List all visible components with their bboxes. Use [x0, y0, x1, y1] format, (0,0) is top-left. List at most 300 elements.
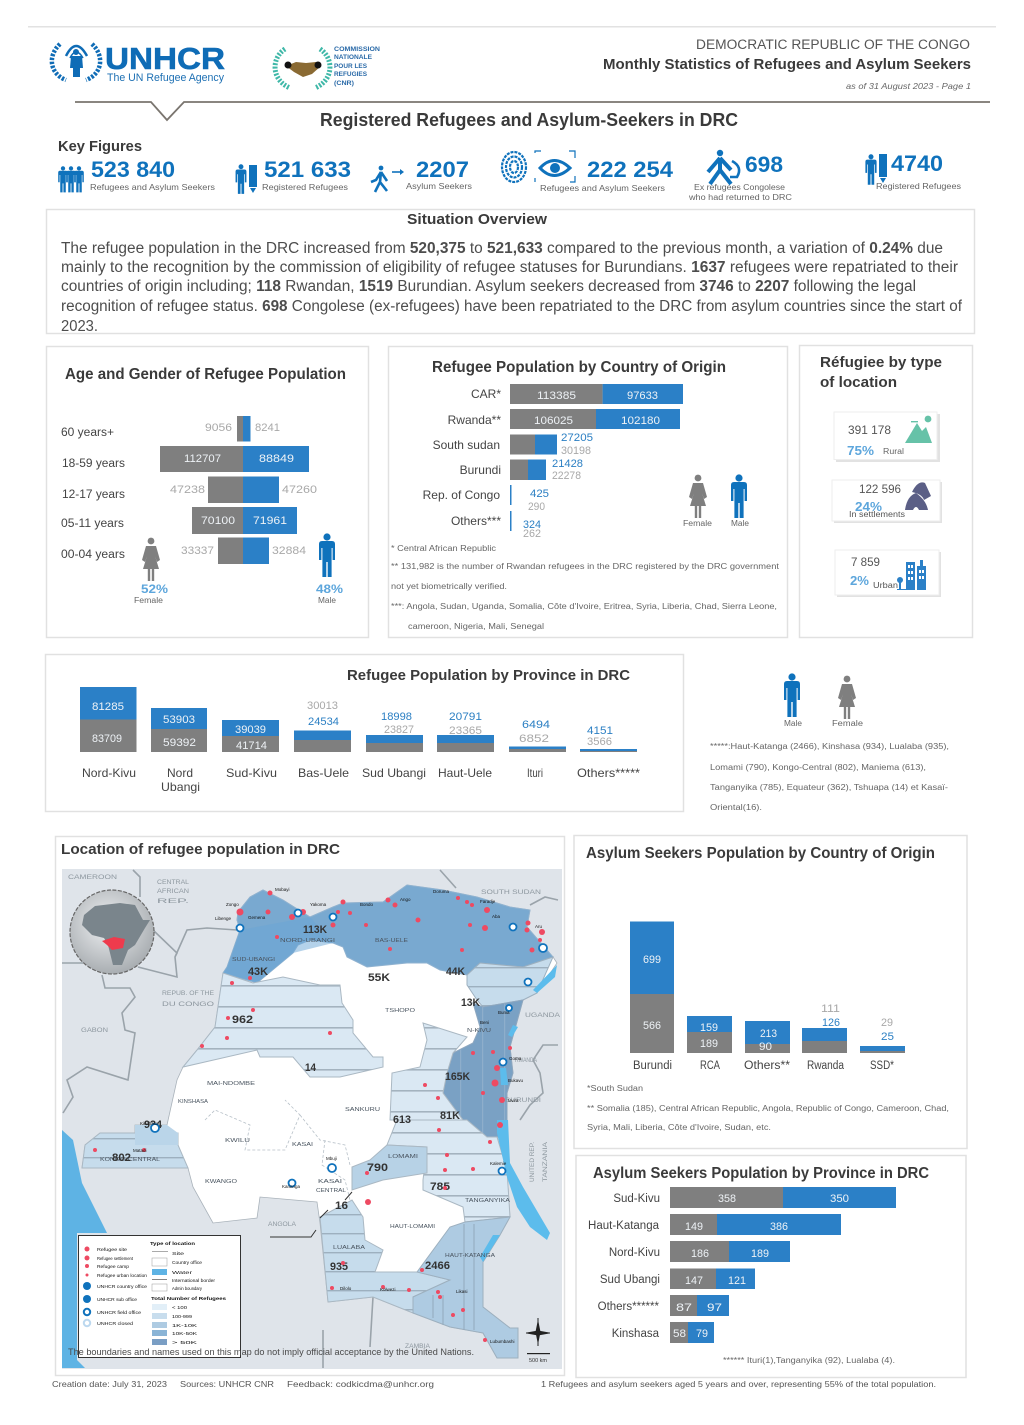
card: rural: 75%: [847, 444, 874, 458]
key figure: returned ex-refugees: [688, 150, 792, 202]
key figure: refugees and asylum seekers: [58, 157, 215, 192]
logo text: [334, 47, 380, 87]
stacked column chart: 39039: [235, 724, 266, 736]
overview paragraph: countries of origin including; 118 Rwandan, 1519 Burundian. Asylum seekers decreased from 3746 to 2207 following the legal: [61, 278, 916, 295]
country labels: [423, 387, 501, 528]
province labels: Bas-Uele: [298, 766, 349, 780]
key figure: asylum seekers: Asylum Seekers: [406, 182, 472, 191]
town labels: Dilolo: [340, 1286, 352, 1291]
legend: boundary types and classes: Admin boundary: [172, 1286, 203, 1291]
legend: boundary types and classes: > 50K: [172, 1340, 197, 1345]
key figure: returned ex-refugees: Ex refugees Congolese: [694, 183, 786, 192]
lakes: [480, 965, 557, 1262]
town labels: Libenge: [215, 916, 232, 921]
town labels: Doruma: [433, 889, 450, 894]
footnote: other provinces: Tanganyika (785), Equateur (362), Tshuapa (14) et Kasaï-: [710, 783, 948, 792]
footnotes: not yet biometrically verified.: [391, 582, 507, 591]
heading: Age and Gender of Refugee Population: [65, 366, 346, 383]
key figure: biometric registration: Refugees and Asylum Seekers: [540, 183, 665, 193]
stacked column chart: 126: [822, 1017, 840, 1029]
stacked bar chart: 27205: [561, 432, 593, 444]
leader lines: [270, 1192, 352, 1237]
stacked bar chart: 102180: [621, 415, 660, 427]
population pyramid: 47238: [170, 484, 205, 496]
stacked column chart: 4151: [587, 725, 613, 737]
province labels: Kinshasa: [612, 1328, 660, 1340]
card: urban: Urban: [873, 581, 898, 590]
province labels: Haut-Uele: [438, 766, 492, 780]
map: [62, 869, 562, 1369]
stacked column chart: 699: [643, 954, 661, 966]
legend: site symbols: UNHCR country office: [97, 1284, 148, 1289]
country labels: TANZANIA: [542, 1141, 549, 1182]
stacked column chart: [630, 922, 905, 1053]
footer: credits: Feedback: codkicdma@unhcr.org: [287, 1379, 434, 1389]
town labels: Uvira: [508, 1098, 519, 1103]
town labels: Lubumbashi: [490, 1339, 515, 1344]
stacked bar chart: 149: [685, 1221, 703, 1233]
footnote: other provinces: [710, 742, 949, 812]
north arrow: [526, 1318, 550, 1346]
province refugee totals: 13K: [461, 997, 480, 1009]
town labels: Bunia: [498, 1010, 510, 1015]
logo text: COMMISSION: [334, 47, 380, 53]
ocean: [62, 1130, 107, 1368]
stacked bar chart: 147: [685, 1275, 703, 1287]
stacked column chart: 23827: [384, 724, 414, 736]
province: Lomami: [352, 1145, 427, 1190]
key figure: biometric registration: 222 254: [587, 157, 674, 182]
province labels: Sud Ubangi: [600, 1274, 660, 1286]
overview paragraph: mainly to the recognition by the commission of eligibility of refugee statuses for Burundians. 1637 refugees were repatriated to their: [61, 259, 958, 276]
icon: eye scan: [535, 151, 575, 182]
footnotes: * Central African Republic: [391, 544, 496, 553]
country labels: ANGOLA: [268, 1221, 297, 1228]
neighbouring country borders: [62, 870, 558, 1368]
province: Equateur and Tshuapa: [183, 973, 383, 1077]
footnote: other provinces: Oriental(16).: [710, 803, 762, 812]
stacked bar chart: 79: [696, 1328, 708, 1340]
province refugee totals: 962: [232, 1014, 253, 1026]
overview paragraph: The refugee population in the DRC increased from 520,375 to 521,633 compared to the previous month, a variation of 0.24% due: [61, 240, 943, 257]
country labels: Others***: [451, 514, 501, 528]
town labels: Bondo: [360, 902, 374, 907]
footer: credits: [52, 1379, 434, 1389]
male share: 48%: [316, 582, 343, 596]
logo text: REFUGIES: [334, 72, 367, 78]
country labels: [68, 874, 561, 1350]
province labels: Nord-Kivu: [609, 1247, 660, 1259]
stacked bar chart: 324: [523, 519, 541, 531]
population pyramid: 33337: [181, 545, 214, 557]
country labels: Rwanda**: [448, 413, 501, 427]
legend: site symbols: Refugee settlement: [97, 1256, 134, 1261]
province refugee totals: 785: [430, 1181, 450, 1193]
country labels: [633, 1060, 894, 1072]
town labels: Bukavu: [508, 1078, 524, 1083]
key figure: asylum seekers: 2207: [416, 157, 469, 182]
province refugee totals: 44K: [446, 966, 465, 978]
icon: tents: [905, 482, 931, 510]
province labels: TSHOPO: [385, 1008, 416, 1014]
overview paragraph: 2023.: [61, 318, 98, 335]
footnote: ****** Ituri(1),Tanganyika (92), Lualaba (4).: [723, 1356, 895, 1365]
population pyramid: [160, 416, 317, 564]
town labels: Kolwezi: [380, 1287, 396, 1292]
legend: boundary types and classes: 100-999: [172, 1314, 193, 1319]
icon: person with document: [865, 154, 887, 185]
stacked bar chart: 358: [718, 1193, 736, 1205]
province labels: SANKURU: [345, 1107, 380, 1113]
country labels: UGANDA: [525, 1012, 561, 1019]
heading: of location: [820, 374, 897, 391]
province labels: Nord-Kivu: [82, 766, 136, 780]
provinces: northern band: [223, 885, 553, 983]
legend: boundary types and classes: Country office: [172, 1260, 203, 1265]
stacked bar chart: 262: [523, 528, 541, 540]
province labels: [588, 1193, 660, 1340]
country labels: Burundi: [460, 463, 501, 477]
province refugee totals: 43K: [248, 966, 268, 978]
legend: boundary types and classes: Total Number of Refugees: [151, 1296, 227, 1301]
province: Ituri: [467, 957, 553, 1007]
stacked bar chart: 97: [707, 1302, 722, 1314]
province labels: N-KIVU: [467, 1028, 491, 1034]
refugee site markers: [93, 890, 545, 1342]
heading: Asylum Seekers Population by Province in DRC: [593, 1165, 929, 1182]
footnotes: [587, 1084, 949, 1132]
stacked bar chart: 425: [530, 488, 549, 500]
logo wordmark: UNHCR: [105, 41, 225, 76]
country labels: REP.: [157, 898, 189, 905]
province: Lualaba: [320, 1200, 450, 1313]
map background: [62, 869, 562, 1369]
header: UNHCR logo: [52, 41, 225, 84]
provinces: Nord-Kivu and Sud-Kivu: [443, 1000, 523, 1137]
main title: Registered Refugees and Asylum-Seekers in DRC: [320, 110, 738, 130]
stacked column chart: 30013: [307, 700, 338, 712]
town labels: Yakoma: [310, 902, 327, 907]
scale bar: [527, 1353, 550, 1364]
stacked column chart: 159: [700, 1022, 718, 1034]
UNHCR office markers: [151, 910, 547, 1186]
province boundaries: [205, 1100, 350, 1200]
stacked column chart: [80, 687, 637, 752]
legend: site symbols: Refugee site: [97, 1247, 128, 1252]
logo text: NATIONALE: [334, 55, 372, 61]
legend: boundary types and classes: < 100: [172, 1305, 188, 1310]
province refugee totals: 802: [112, 1152, 131, 1164]
town labels: Zongo: [226, 902, 239, 907]
province labels: Sud-Kivu: [226, 766, 277, 780]
icon: female: [142, 538, 160, 581]
country labels: Rwanda: [807, 1060, 845, 1072]
province: Kinshasa: [135, 1125, 178, 1145]
province refugee totals: 935: [330, 1261, 348, 1273]
country labels: CAMEROON: [68, 874, 117, 881]
province labels: [100, 938, 510, 1259]
province labels: Sud-Kivu: [613, 1193, 660, 1205]
top rule: [28, 26, 996, 28]
province: Haut-Katanga: [413, 1217, 518, 1358]
province labels: KWILU: [225, 1138, 250, 1144]
stacked column chart: 566: [643, 1020, 661, 1032]
panel: asylum seekers by country of origin: [574, 836, 967, 1148]
town labels: Kananga: [282, 1184, 301, 1189]
population pyramid: 88849: [259, 453, 294, 465]
male share: [316, 582, 343, 605]
footnotes: *South Sudan: [587, 1084, 643, 1093]
card: rural: [834, 412, 940, 462]
stacked column chart: 3566: [587, 736, 612, 748]
province: Maniema: [390, 1023, 467, 1120]
stacked column chart: 90: [759, 1041, 772, 1053]
population pyramid: 9056: [205, 422, 232, 434]
age labels: 05-11 years: [61, 518, 124, 530]
header: report title block: [603, 37, 971, 91]
legend: site symbols: [83, 1246, 148, 1326]
heading: Réfugiee by type: [820, 354, 942, 371]
stacked column chart: 111: [821, 1003, 840, 1015]
town labels: Kalemie: [490, 1161, 507, 1166]
country labels: GABON: [81, 1027, 108, 1034]
town labels: Matadi: [133, 1148, 147, 1153]
province labels: TANGANYIKA: [465, 1198, 510, 1204]
key figure: registered refugees 4740: Registered Refugees: [876, 181, 961, 191]
key figure: registered refugees 4740: 4740: [891, 151, 943, 176]
province labels: MAI-NDOMBE: [207, 1081, 255, 1087]
town labels: Likasi: [456, 1289, 468, 1294]
footnotes: ** 131,982 is the number of Rwandan refugees in the DRC registered by the DRC government: [391, 562, 780, 571]
heading: key figures: Key Figures: [58, 139, 142, 155]
province refugee totals: 165K: [445, 1071, 470, 1083]
legend: site symbols: UNHCR closed: [97, 1321, 134, 1326]
DRC white base: [82, 885, 557, 1358]
province: Kongo-Central: [82, 1133, 188, 1168]
female share: 52%: [141, 582, 168, 596]
key figure: registered refugees 4740: [865, 151, 961, 191]
province refugee totals: 16: [335, 1200, 348, 1212]
town labels: Goma: [509, 1056, 522, 1061]
globe inset: [70, 890, 154, 974]
logo text: (CNR): [334, 81, 354, 87]
province refugee totals: 113K: [303, 924, 327, 936]
stacked column chart: 189: [700, 1038, 718, 1050]
stacked column chart: 6494: [522, 719, 550, 731]
province labels: Haut-Katanga: [588, 1220, 660, 1232]
legend: boundary types and classes: 1K-10K: [172, 1323, 197, 1328]
province refugee totals: 81K: [440, 1110, 460, 1122]
header: report title block: DEMOCRATIC REPUBLIC OF THE CONGO: [696, 37, 970, 52]
female share: [134, 582, 168, 605]
stacked bar chart: 121: [728, 1275, 746, 1287]
country labels: Burundi: [633, 1060, 672, 1072]
card: rural: Rural: [883, 447, 904, 456]
country labels: SOUTH SUDAN: [481, 889, 541, 896]
panel: asylum seekers by province: [576, 1156, 966, 1378]
icon: group of people: [58, 166, 84, 192]
town labels: Kinshasa: [140, 1121, 159, 1126]
town labels: Beni: [480, 1020, 489, 1025]
country labels: ZAMBIA: [405, 1343, 431, 1350]
key figure: asylum seekers: [371, 157, 472, 192]
panel: refugee by type of location: [800, 346, 972, 638]
footnotes: cameroon, Nigeria, Mali, Senegal: [408, 622, 544, 631]
logo tagline: The UN Refugee Agency: [107, 72, 224, 84]
legend: female: Female: [683, 519, 713, 528]
panel: age and gender: [46, 346, 368, 638]
stacked column chart: 23365: [449, 725, 482, 737]
age labels: [61, 427, 125, 561]
province: Tanganyika: [387, 1120, 510, 1222]
town labels: Aru: [535, 924, 542, 929]
province labels: HAUT-KATANGA: [445, 1253, 495, 1259]
stacked column chart: 24534: [308, 716, 339, 728]
country labels: South sudan: [433, 438, 500, 452]
footer: population note: 1 Refugees and asylum seekers aged 5 years and over, representing 55% of the total population.: [541, 1379, 936, 1389]
legend: male and female for province chart: Male: [784, 719, 803, 728]
legend: site symbols: UNHCR sub office: [97, 1297, 138, 1302]
town labels: Mbuji: [326, 1156, 337, 1161]
country labels: BURUNDI: [505, 1097, 541, 1104]
province refugee totals: 613: [393, 1114, 411, 1126]
province labels: KWANGO: [205, 1179, 238, 1185]
age labels: 18-59 years: [62, 458, 125, 470]
stacked bar chart: 87: [676, 1302, 692, 1314]
stacked column chart: 6852: [519, 733, 549, 745]
population pyramid: 70100: [201, 515, 235, 527]
stacked bar chart: 290: [528, 501, 545, 513]
province labels: BAS-UELE: [375, 938, 408, 944]
heading: Location of refugee population in DRC: [61, 841, 340, 858]
footnotes: ***: Angola, Sudan, Uganda, Somalia, Côte d'Ivoire, Eritrea, Syria, Liberia, Chad, Sierra Leone,: [391, 602, 777, 611]
country labels: DU CONGO: [162, 1001, 214, 1008]
country labels: Rep. of Congo: [423, 488, 500, 502]
card: urban: 2%: [850, 574, 869, 588]
legend: male and female for province chart: [784, 673, 864, 728]
heading: Refugee Population by Province in DRC: [347, 667, 630, 684]
stacked bar chart: 189: [751, 1248, 769, 1260]
key figure: returned ex-refugees: 698: [745, 152, 783, 177]
heading: [820, 354, 942, 391]
province labels: KASAI: [318, 1179, 343, 1185]
stacked column chart: 83709: [92, 733, 122, 745]
legend: site symbols: Refugee urban location: [97, 1273, 148, 1278]
stacked bar chart: 58: [673, 1328, 686, 1340]
stacked column chart: 41714: [236, 740, 267, 752]
country labels: RWANDA: [515, 1057, 538, 1064]
town labels: Ango: [400, 897, 411, 902]
legend: male: [731, 474, 750, 528]
country labels: REPUB. OF THE: [162, 990, 215, 997]
population pyramid: 8241: [255, 422, 280, 434]
province refugee totals: 934: [144, 1119, 163, 1131]
province labels: KASAI: [292, 1142, 314, 1148]
population pyramid: 32884: [272, 545, 306, 557]
stacked bar chart: [510, 384, 683, 540]
header: CNR logo: [275, 47, 380, 88]
footnote: other provinces: Lomami (790), Kongo-Central (802), Maniema (613),: [710, 763, 926, 772]
female share: Female: [134, 596, 164, 605]
age labels: 12-17 years: [62, 489, 125, 501]
province refugee totals: 14: [305, 1062, 317, 1074]
map disclaimer: The boundaries and names used on this map do not imply official acceptance by the United Nations.: [68, 1347, 474, 1358]
icon: walking person with arrow: [371, 166, 404, 192]
stacked bar chart: 30198: [561, 445, 591, 457]
card: in settlements: In settlements: [849, 510, 905, 519]
scale bar: 500 km: [529, 1358, 547, 1364]
footnotes: ** Somalia (185), Central African Republic, Angola, Republic of Congo, Cameroon, Chad,: [587, 1104, 949, 1113]
key figure: registered refugees: 521 633: [264, 157, 351, 182]
population pyramid: 47260: [282, 484, 317, 496]
key figure: refugees and asylum seekers: Refugees and Asylum Seekers: [90, 182, 215, 192]
icon: male: [319, 533, 335, 577]
province labels: Ubangi: [161, 780, 200, 794]
population pyramid: 112707: [184, 453, 221, 465]
country labels: RCA: [700, 1060, 720, 1072]
icon: UNHCR emblem: [52, 44, 100, 80]
stacked column chart: 29: [881, 1017, 893, 1029]
country labels: SSD*: [870, 1060, 894, 1072]
stacked column chart: 53903: [163, 714, 195, 726]
legend: site symbols: UNHCR field office: [97, 1310, 142, 1315]
legend: boundary types and classes: [150, 1241, 227, 1345]
icon: person with document: [236, 164, 257, 194]
key figure: returned ex-refugees: who had returned to DRC: [688, 193, 792, 202]
male share: Male: [318, 596, 337, 605]
province refugee totals: 55K: [368, 972, 390, 984]
footer: credits: Sources: UNHCR CNR: [180, 1379, 274, 1389]
stacked bar chart: 21428: [552, 458, 583, 470]
country labels: AFRICAN: [157, 888, 189, 895]
card: rural: 391 178: [848, 425, 891, 437]
card: in settlements: 24%: [855, 500, 882, 514]
town labels: Faradje: [480, 899, 496, 904]
town labels: Gemena: [248, 915, 266, 920]
province labels: Nord: [167, 766, 193, 780]
province refugee totals: [112, 924, 480, 1273]
logo text: POUR LES: [334, 64, 367, 70]
country labels: UNITED REP.: [529, 1142, 536, 1182]
icon: wreath and handshake: [275, 49, 330, 88]
province labels: NORD-UBANGI: [280, 938, 336, 944]
legend: boundary types and classes: International border: [172, 1278, 216, 1283]
legend: site symbols: Refugee camp: [97, 1264, 130, 1269]
header rule with chevron: [75, 102, 990, 120]
province labels: Ituri: [527, 766, 543, 780]
panel: location of refugee population map: [56, 836, 564, 1376]
legend: male and female for province chart: Female: [832, 719, 864, 728]
province labels: KONGO-CENTRAL: [100, 1157, 160, 1163]
header: report title block: Monthly Statistics of Refugees and Asylum Seekers: [603, 56, 971, 73]
card: urban: 7 859: [851, 557, 880, 569]
panel: refugee population by country of origin: [388, 346, 788, 638]
age labels: 60 years+: [61, 427, 114, 439]
stacked bar chart: 113385: [537, 390, 576, 402]
legend: boundary types and classes: Site: [172, 1251, 185, 1256]
province labels: HAUT-LOMAMI: [390, 1224, 436, 1230]
province labels: Others*****: [577, 766, 640, 780]
country labels: CAR*: [471, 387, 501, 401]
country labels: CENTRAL: [157, 879, 189, 886]
stacked column chart: 213: [760, 1028, 777, 1040]
country labels: Others**: [744, 1060, 791, 1072]
town labels: Aba: [492, 914, 501, 919]
province labels: Sud Ubangi: [362, 766, 426, 780]
province labels: CENTRAL: [316, 1188, 346, 1194]
province labels: [82, 766, 640, 794]
province labels: KINSHASA: [178, 1099, 208, 1105]
